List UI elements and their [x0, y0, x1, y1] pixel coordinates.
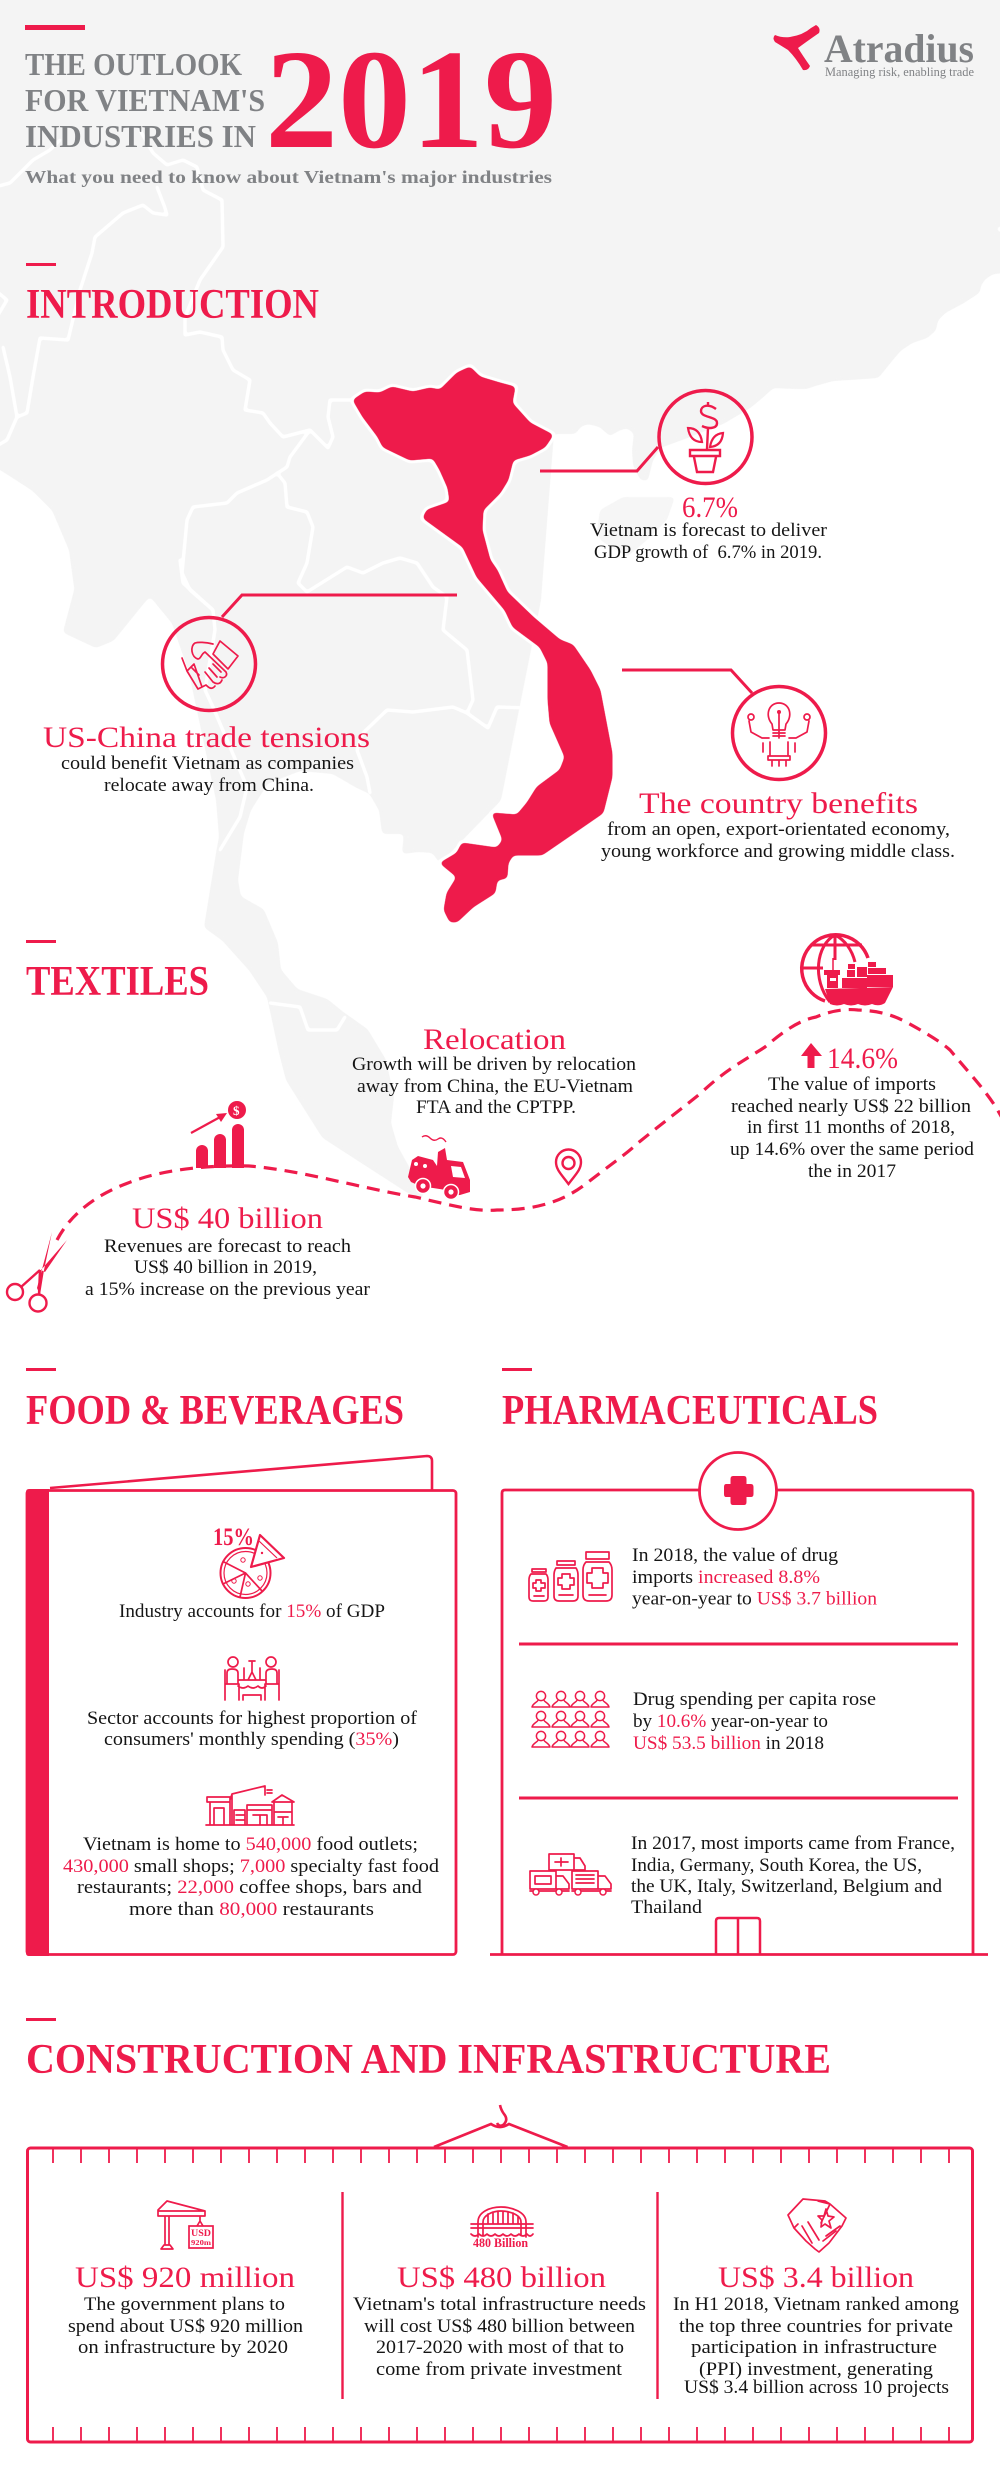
description: 480 billion: 2017-2020 with most of that to — [376, 2337, 624, 2358]
panel: pharmacy building: imports increased 8.8% — [632, 1567, 820, 1588]
panel: pharmacy building: Thailand — [631, 1897, 703, 1918]
icon: pizza — [220, 1535, 284, 1598]
Atradius logo — [774, 25, 974, 79]
icon: crane: USD — [191, 2229, 211, 2239]
icon: people group — [532, 1691, 609, 1747]
description: 920 million: The government plans to — [84, 2294, 285, 2315]
callout: country benefits — [601, 670, 955, 862]
heading: introduction: INTRODUCTION — [26, 282, 319, 328]
frame ticks — [53, 2149, 949, 2441]
divider — [519, 1644, 958, 1798]
frame — [28, 2148, 972, 2442]
connector line — [540, 447, 658, 471]
stat block: US$ 40 billion: a 15% increase on the previous year — [85, 1279, 371, 1300]
ground line — [490, 1953, 988, 1956]
subtitle: What you need to know about Vietnam's major industries — [25, 167, 552, 187]
outlets text: Vietnam is home to 540,000 food outlets; — [83, 1834, 418, 1855]
panel: construction frame — [28, 2105, 972, 2442]
icon: globe and cargo ship — [801, 935, 893, 1006]
icon: diners at table — [225, 1657, 279, 1700]
description: 480 billion — [353, 2294, 646, 2380]
menu front page — [27, 1490, 456, 1954]
heading: construction and infrastructure: CONSTRUCTION AND INFRASTRUCTURE — [26, 2037, 831, 2083]
stat block: relocation: Growth will be driven by relocation — [352, 1054, 637, 1075]
logo mark — [774, 25, 820, 70]
panel: food menu card: restaurants; 22,000 coffee shops, bars and — [77, 1877, 423, 1898]
panel: pharmacy building: the UK, Italy, Switzerland, Belgium and — [631, 1876, 942, 1897]
stat block: US$ 40 billion — [85, 1202, 371, 1300]
stat: 3.4 billion: US$ 3.4 billion — [718, 2261, 914, 2294]
icon: crane: 920m — [191, 2238, 212, 2247]
map: grey landmass — [0, 0, 1000, 1198]
building door — [716, 1918, 760, 1954]
heading: construction and infrastructure — [26, 2018, 831, 2083]
heading: food and beverages — [26, 1368, 404, 1434]
icon: lightbulb figure — [732, 686, 826, 780]
column dividers — [342, 2192, 658, 2399]
icon: medicine bottles — [529, 1552, 612, 1601]
icon: plant with dollar — [659, 390, 752, 484]
icon: partnership hands — [788, 2199, 846, 2252]
hanger and hook — [434, 2105, 568, 2147]
stat block: 14.6% imports: reached nearly US$ 22 billion — [731, 1096, 972, 1117]
import origins text: In 2017, most imports came from France, — [631, 1833, 955, 1854]
Vietnam outline halo — [353, 367, 612, 922]
stat block: US$ 40 billion: US$ 40 billion — [132, 1202, 323, 1235]
Vietnam highlighted shape — [353, 367, 612, 922]
description: 3.4 billion: In H1 2018, Vietnam ranked among — [673, 2294, 960, 2315]
description: 480 billion: will cost US$ 480 billion between — [364, 2316, 636, 2337]
description: 3.4 billion — [673, 2294, 960, 2398]
description: 480 billion: come from private investment — [376, 2359, 623, 2380]
stat block: 14.6% imports: up 14.6% over the same period — [730, 1139, 975, 1160]
stat block: relocation: away from China, the EU-Vietnam — [357, 1076, 633, 1097]
description: 920 million: on infrastructure by 2020 — [78, 2337, 288, 2358]
stat: 6.7% — [682, 491, 738, 524]
description: could benefit Vietnam as companies — [61, 753, 354, 774]
icon: bridge — [471, 2207, 533, 2250]
stat: 920 million: US$ 920 million — [75, 2261, 295, 2294]
stat block: relocation: FTA and the CPTPP. — [416, 1097, 576, 1118]
callout: GDP growth: GDP growth of 6.7% in 2019. — [594, 542, 822, 563]
drug imports text: In 2018, the value of drug — [632, 1545, 839, 1566]
panel: pharmacy building: India, Germany, South Korea, the US, — [631, 1855, 922, 1876]
title line 3: INDUSTRIES IN — [25, 118, 256, 154]
panel: pharmacy building — [490, 1452, 988, 1954]
panel: food menu card: more than 80,000 restaurants — [129, 1899, 374, 1920]
panel: pharmacy building: US$ 53.5 billion in 2018 — [633, 1733, 824, 1754]
stat: 480 billion: US$ 480 billion — [397, 2261, 606, 2294]
stat block: 14.6% imports: 14.6% — [827, 1042, 898, 1075]
menu spine — [26, 1489, 49, 1956]
GDP text: Industry accounts for 15% of GDP — [119, 1601, 385, 1622]
title year: 2019 — [265, 20, 557, 178]
stat block: 14.6% imports — [730, 1042, 975, 1182]
dashed route line — [57, 1010, 1000, 1240]
icon: scissors — [7, 1232, 67, 1312]
heading: pharmaceuticals: PHARMACEUTICALS — [502, 1388, 878, 1434]
icon: up arrow — [801, 1043, 822, 1068]
stat block: US$ 40 billion: Revenues are forecast to reach — [104, 1236, 352, 1257]
heading: introduction — [26, 263, 319, 328]
medical cross emblem — [700, 1452, 776, 1530]
map: country borders — [0, 130, 547, 1030]
logo tagline: Managing risk, enabling trade — [825, 64, 974, 79]
description: 3.4 billion: US$ 3.4 billion across 10 projects — [684, 2377, 949, 2398]
icon: delivery trucks — [530, 1854, 611, 1895]
background map — [0, 0, 1000, 1198]
icon: shop fronts — [206, 1786, 294, 1825]
callout: US-China trade tensions — [43, 595, 457, 796]
stat block: 14.6% imports: The value of imports — [768, 1074, 936, 1095]
panel: food menu card: consumers' monthly spending ( 35%) — [104, 1729, 399, 1750]
icon: crane — [158, 2201, 213, 2249]
stat block: relocation: Relocation — [423, 1023, 566, 1056]
panel: pharmacy building: year-on-year to US$ 3.7 billion — [632, 1588, 878, 1610]
connector line — [622, 670, 752, 693]
logo wordmark: Atradius — [824, 26, 974, 71]
panel: food menu card: 430,000 small shops; 7,000 specialty fast food — [63, 1856, 440, 1877]
description: 480 billion: Vietnam's total infrastructure needs — [353, 2294, 646, 2315]
stat block: 14.6% imports: in first 11 months of 2018, — [747, 1117, 955, 1138]
panel: food menu card — [26, 1456, 456, 1956]
icon: location pin — [556, 1150, 581, 1184]
heading: pharmaceuticals — [502, 1368, 878, 1434]
description: 3.4 billion: (PPI) investment, generating — [699, 2359, 934, 2380]
callout: country benefits: young workforce and growing middle class. — [601, 841, 955, 862]
spending text: Sector accounts for highest proportion of — [87, 1708, 418, 1729]
description: 3.4 billion: the top three countries for private — [679, 2316, 953, 2337]
stat block: US$ 40 billion: US$ 40 billion in 2019, — [134, 1257, 317, 1278]
icon: rising revenue bars: $ — [233, 1103, 240, 1118]
heading: textiles: TEXTILES — [26, 959, 209, 1005]
menu back page — [50, 1456, 432, 1490]
panel: pharmacy building: by 10.6% year-on-year to — [633, 1711, 828, 1732]
callout: US-China trade tensions: relocate away from China. — [104, 775, 314, 796]
heading: textiles — [26, 940, 209, 1005]
description: 920 million: spend about US$ 920 million — [68, 2316, 304, 2337]
icon: bridge: 480 Billion — [473, 2235, 529, 2250]
callout: GDP growth — [540, 390, 828, 563]
description: Vietnam is forecast to deliver — [590, 520, 828, 541]
title accent bar — [25, 25, 85, 30]
spending per capita text: Drug spending per capita rose — [633, 1689, 876, 1710]
heading: US-China trade tensions — [43, 721, 370, 754]
description: from an open, export-orientated economy, — [607, 819, 950, 840]
icon: handshake — [162, 618, 256, 710]
description: 3.4 billion: participation in infrastructure — [691, 2337, 937, 2358]
pizza stat: 15% — [213, 1524, 254, 1551]
building outline — [502, 1490, 973, 1954]
map: Hainan island — [597, 497, 675, 557]
description: 920 million — [68, 2294, 304, 2358]
title line 1: THE OUTLOOK — [25, 46, 242, 82]
title line 2: FOR VIETNAM'S — [25, 82, 265, 118]
connector line — [222, 595, 457, 617]
heading: The country benefits — [639, 787, 918, 820]
stat block: 14.6% imports: the in 2017 — [808, 1161, 896, 1182]
stat block: relocation — [352, 1023, 637, 1118]
heading: food and beverages: FOOD & BEVERAGES — [26, 1388, 404, 1434]
icon: rising revenue bars — [191, 1101, 246, 1168]
icon: truck — [408, 1136, 470, 1200]
title block — [25, 20, 557, 187]
